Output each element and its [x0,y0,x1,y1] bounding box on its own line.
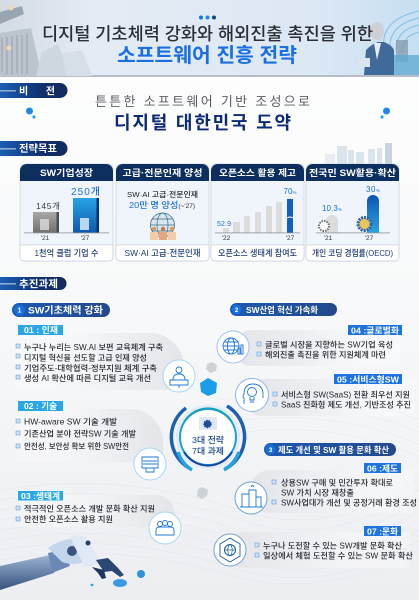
panel: SW company growth [20,164,113,261]
pill: strategy 2 [230,303,337,316]
title line 2: 소프트웨어 진흥 전략 [117,44,297,67]
years [222,235,295,242]
highlighted goal: 20만 명 양성 (~'27) [129,200,195,210]
outer arcs [171,406,245,470]
gray bar [326,215,338,232]
list: 해외진출 촉진을 위한 지원체계 마련 [265,350,386,360]
list [255,540,414,560]
list: 안전한 오픈소스 활용 지원 [24,514,113,524]
blue bar [367,195,379,232]
heading: 전국민 SW활용·확산 [309,167,397,178]
panel: nationwide SW use [306,164,399,261]
tag: 01 : 인재 [24,325,58,335]
vision subtitle: 튼튼한 소프트웨어 기반 조성으로 [95,94,310,109]
dots [199,16,216,20]
bar chart [223,199,293,232]
years: '21 [41,235,50,242]
footer label: 개인 코딩 경험률(OECD) [312,248,393,258]
icon: monitor [134,448,166,480]
section pill: vision: 비 전 [19,84,55,98]
panel: 06 institution [250,463,417,513]
list [257,340,393,360]
years: '27 [365,235,374,242]
years: '21 [324,235,333,242]
list: HW-aware SW 기술 개발 [24,416,118,426]
header banner [0,0,419,77]
icon: talent [163,360,195,392]
hub text line 2: 7대 과제 [192,446,224,456]
pill: strategy 2: SW산업 혁신 가속화 [246,305,318,315]
value 52.9: 52.9 [217,221,231,228]
icon: head bulb [236,378,268,412]
icon: globe with people [150,213,176,240]
years [324,235,374,242]
tag: 06 :제도 [367,464,398,474]
icon: gear gray [319,221,329,231]
icon: community [149,512,181,544]
icon: businessman and rings right [358,11,419,75]
panel: 03 ecosystem [15,491,175,527]
pill: strategy 3: 제도 개선 및 SW 활용 문화 확산 [278,445,389,455]
bar 2027 [73,198,99,233]
tag: 04 :글로벌화 [351,326,399,336]
value 10.3%: 10.3% [322,204,342,213]
list: 누구나 누리는 SW.AI 보편 교육체계 구축 [24,342,163,352]
value 145: 145개 [36,201,60,211]
text: SW·AI 고급·전문인재 [127,189,198,199]
icon: buildings left [0,6,92,76]
tag: 05 :서비스형SW [337,374,400,384]
list: 서비스형 SW(SaaS) 전환 최우선 지원 [281,390,410,400]
list: 글로벌 시장을 지향하는 SW기업 육성 [265,340,393,350]
section pill: strategy goals [0,141,68,156]
section pill: strategy goals: 전략목표 [19,142,57,155]
bar 2021 [33,212,59,233]
icon: gear blue [358,218,371,230]
icon: gem bottom [197,487,208,499]
illustration: robot arm [0,535,145,590]
list [273,390,411,410]
years: '22 [222,235,231,242]
heading: 오픈소스 활용 제고 [219,167,296,178]
pill: strategy 3: 3 [269,447,273,454]
heading: SW기업성장 [40,167,94,178]
list: 디지털 혁신을 선도할 고급 인재 양성 [24,352,147,362]
value 250: 250개 [71,185,100,198]
icon: gem top [206,362,217,373]
list [16,504,155,524]
list [16,416,137,451]
icon: gear window [199,417,217,430]
footer label: 오픈소스 생태계 참여도 [218,248,297,258]
pill: strategy 3 [264,443,396,456]
footer label: 1천억 클럽 기업 수 [34,248,99,258]
list: 기업주도-대학협력-정부지원 체계 구축 [24,363,157,373]
icon: blue cube [200,378,217,396]
panel: 05 service SW [244,374,415,416]
list: SW사업대가 개선 및 공정거래 환경 조성 [281,498,417,508]
list: 안전성, 보안성 확보 위한 SW안전 [24,441,129,451]
list: 적극적인 오픈소스 개발 문화 확산 지원 [24,504,155,514]
pill: strategy 1: 1 [18,308,22,314]
value 70%: 70% [284,187,296,196]
footer label: SW·AI 고급·전문인재 [124,248,201,258]
years: '27 [81,235,90,242]
tag: 07 :문화 [367,526,398,536]
list: SW 가치 시장 재창출 [281,488,354,498]
years [41,235,90,242]
pill: strategy 1 [12,303,110,317]
icon: blue dots right [380,108,390,119]
hub text line 1: 3대 전략 [192,435,224,445]
list: 누구나 도전할 수 있는 SW개발 문화 확산 [263,540,403,550]
center hub [171,405,245,470]
decorative skyline [325,143,392,164]
section pill: tasks [0,277,66,290]
list [272,478,417,508]
title line 1: 디지털 기초체력 강화와 해외진출 촉진을 위한 [42,24,373,44]
panel: 04 globalization [234,325,402,366]
heading: 고급·전문인재 양성 [122,167,202,178]
list: 기존산업 분야 전략SW 기술 개발 [24,428,137,438]
value 30%: 30% [366,185,380,194]
panel: 01 talent [15,325,184,390]
list: 일상에서 체험 도전할 수 있는 SW 문화 확산 [263,550,414,560]
panel: advanced talent [116,164,209,261]
icon: globe chart [217,331,249,363]
panel: open source [211,164,304,261]
decorative wave pattern [0,393,419,584]
section pill: tasks: 추진과제 [19,278,58,290]
tag: 02 : 기술 [24,401,57,411]
pill: strategy 1: SW기초체력 강화 [28,304,103,316]
panel: 02 technology [15,401,163,462]
section pill: vision [0,83,68,98]
panel: 07 culture [227,526,414,568]
icon: network globe [214,534,246,566]
icon: city [235,482,267,514]
list [16,342,163,383]
list: SaaS 친화형 제도 개선, 기반조성 추진 [281,400,411,410]
pill: strategy 2: 2 [235,307,239,314]
list: 생성 AI 확산에 따른 디지털 교육 개선 [24,373,151,383]
vision headline: 디지털 대한민국 도약 [114,113,291,133]
icon: blue dots left [26,108,36,119]
tag: 03 :생태계 [21,491,60,501]
list: 상용SW 구매 및 민간투자 확대로 [281,478,393,488]
years: '27 [286,235,295,242]
